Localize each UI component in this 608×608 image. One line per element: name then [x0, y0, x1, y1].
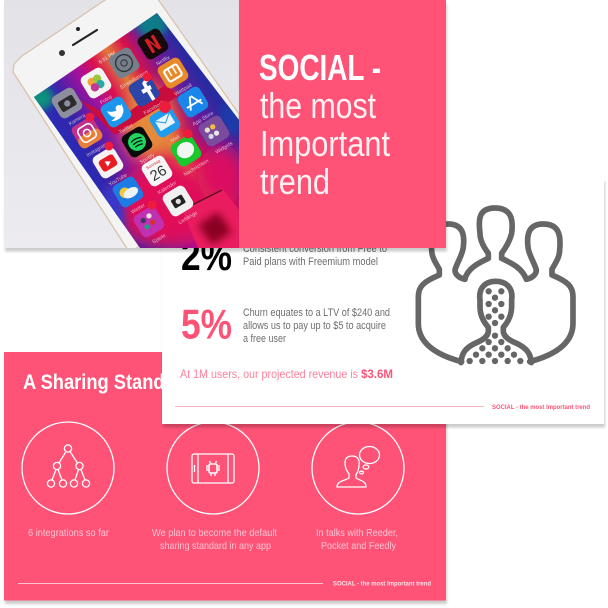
icon: tablet in circle	[167, 422, 259, 514]
heading: social - the most important trend: Important	[260, 123, 390, 164]
text: conversion: Paid plans with Freemium model	[243, 256, 378, 268]
caption: talks: In talks with Reeder,	[316, 527, 398, 539]
app icons: 26	[148, 163, 170, 185]
panel: conversion stats	[162, 178, 604, 424]
text: churn: a free user	[243, 333, 286, 345]
caption: talks	[316, 527, 398, 552]
app icons: Netflix	[156, 55, 171, 67]
app icons: Kamera	[68, 113, 87, 127]
app icons: YouTube	[108, 172, 129, 188]
app icons: Kalender	[157, 180, 178, 196]
app icons: Einstellungen	[119, 69, 149, 91]
icon: network tree in circle	[22, 422, 114, 514]
footer line	[175, 406, 484, 407]
app icons: Spotify	[139, 152, 156, 166]
text: conversion	[243, 243, 387, 268]
heading: social - the most important trend: SOCIAL -	[259, 47, 381, 88]
photo: smartphone home screen	[4, 0, 246, 250]
text: churn: Churn equates to a LTV of $240 and	[243, 307, 390, 319]
text: projected revenue: At 1M users, our projected revenue is	[180, 367, 358, 381]
app icons: Fotos	[99, 94, 114, 106]
icon: group of people	[418, 208, 573, 364]
stat: 2%: 2%	[181, 232, 232, 279]
app icons: Wattpad	[173, 83, 193, 98]
app icons: Facebook	[143, 99, 166, 117]
panel: title	[239, 0, 446, 248]
app icons: Sonntag	[145, 158, 162, 170]
app icons: Nachrichten	[183, 158, 210, 178]
app icons: Twitter	[118, 122, 135, 136]
photo shadow	[4, 0, 239, 248]
text: conversion: Consistent conversion from Free to	[243, 243, 387, 255]
app icons: App Store	[192, 111, 215, 128]
footer line	[18, 583, 323, 584]
app icons: Wetter	[130, 202, 147, 216]
icon: person with speech bubble in circle	[312, 422, 404, 514]
text: churn: allows us to pay up to $5 to acquire	[243, 320, 386, 332]
heading: social - the most important trend: trend	[260, 161, 330, 202]
app icons: Instagram	[86, 141, 109, 159]
footer text: SOCIAL - the most Important trend	[492, 404, 590, 411]
app icons: Mail	[170, 134, 181, 144]
app icons	[50, 27, 237, 248]
phone details: 6:31 PM	[98, 51, 117, 66]
app icons: Lieblinge	[178, 210, 199, 226]
footer text: SOCIAL - the most Important trend	[333, 580, 431, 588]
heading: social - the most important trend: the most	[260, 85, 376, 126]
phone details	[59, 27, 117, 66]
heading: a sharing standard: A Sharing Standard	[23, 371, 193, 394]
caption: sharing standard plan	[152, 527, 277, 552]
caption: sharing standard plan: We plan to become the default	[152, 527, 277, 539]
panel: a sharing standard	[4, 352, 446, 600]
heading: social - the most important trend	[259, 47, 390, 202]
stat: 5%: 5%	[181, 300, 232, 348]
caption: integrations: 6 integrations so far	[28, 527, 109, 539]
caption: talks: Pocket and Feedly	[321, 540, 397, 552]
app icons: Widgets	[215, 140, 234, 156]
app icons: Spiele	[151, 233, 167, 245]
text: projected revenue: $3.6M	[361, 367, 393, 381]
caption: sharing standard plan: sharing standard in any app	[160, 540, 271, 552]
text: churn	[243, 307, 390, 345]
